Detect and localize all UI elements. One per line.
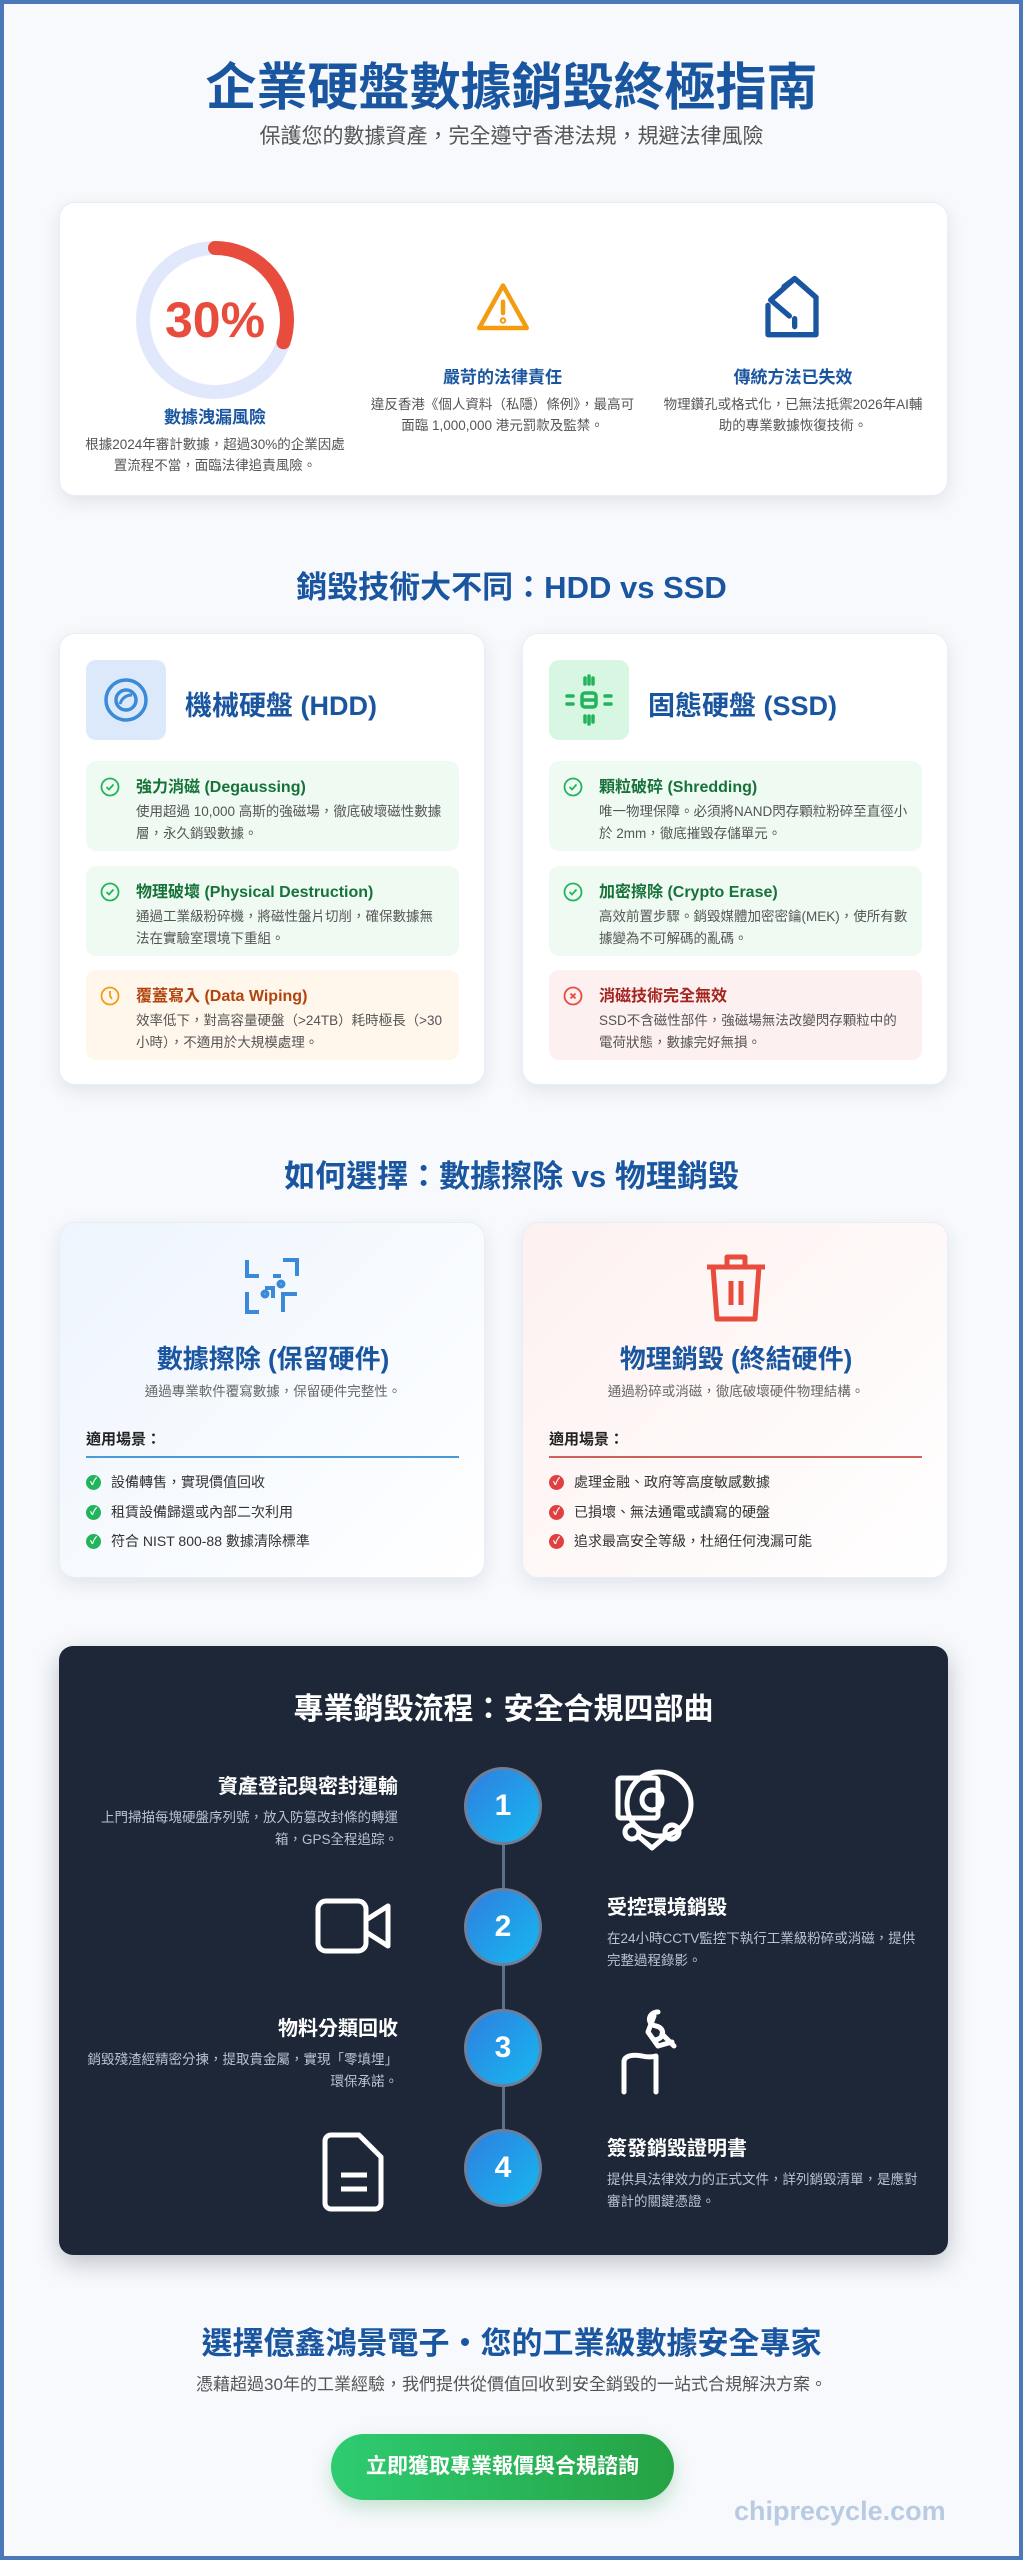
heading: 專業銷毀流程：安全合規四部曲: [294, 1693, 714, 1726]
timeline line: [502, 1806, 505, 2166]
button: CTA: [331, 2434, 674, 2500]
icon: step 4 document: [322, 2132, 384, 2212]
text: brand description: 憑藉超過30年的工業經驗，我們提供從價值回收到安全銷毀的一站式合規解決方案。: [196, 2375, 827, 2394]
panel: physical destruction: ✓: [553, 1506, 560, 1518]
panel: physical destruction: [522, 1222, 948, 1578]
icon: step 2 camera: [316, 1898, 390, 1954]
item: physical destruction: 物理破壞 (Physical Destruction): [136, 884, 373, 901]
step 2: [464, 1888, 542, 1966]
text: step 3: 銷毀殘渣經精密分揀，提取貴金屬，實現「零填埋」環保承諾。: [88, 2052, 398, 2089]
text: step 1: [101, 1776, 398, 1847]
step 3: [464, 2009, 542, 2087]
panel: risk stats: [59, 202, 948, 496]
text: data leak risk: 數據洩漏風險: [164, 408, 266, 427]
heading: SSD: 固態硬盤 (SSD): [648, 691, 837, 721]
item: crypto erase: 加密擦除 (Crypto Erase): [599, 884, 778, 901]
step 1: 1: [495, 1789, 511, 1822]
chart: 30% ring: 30%: [165, 292, 265, 348]
heading: wipe vs destroy: 如何選擇：數據擦除 vs 物理銷毀: [284, 1159, 739, 1194]
step 2: 2: [495, 1910, 511, 1943]
text: step 2: [607, 1896, 915, 1968]
item: data wiping: 覆蓋寫入 (Data Wiping): [136, 988, 307, 1005]
icon: chip: [549, 660, 629, 740]
icon: step 1 transport: [616, 1770, 694, 1851]
list: ✓: [90, 1476, 97, 1488]
step 4: [464, 2129, 542, 2207]
text: step 3: [88, 2018, 398, 2089]
text: step 2: 受控環境銷毀: [607, 1897, 727, 1919]
text: legal liability: 違反香港《個人資料（私隱）條例》，最高可面臨 1,000,000 港元罰款及監禁。: [371, 397, 634, 433]
heading: HDD: 機械硬盤 (HDD): [185, 691, 377, 721]
text: step 2: 在24小時CCTV監控下執行工業級粉碎或消磁，提供完整過程錄影。: [607, 1931, 915, 1968]
text: step 4: [607, 2138, 918, 2209]
heading: 物理銷毀 (終結硬件): [620, 1344, 852, 1374]
icon: broken box: [765, 276, 819, 338]
item: data wiping: [86, 970, 459, 1060]
text: step 4: 提供具法律效力的正式文件，詳列銷毀清單，是應對審計的關鍵憑證。: [607, 2172, 918, 2209]
icon: scan: [245, 1258, 299, 1314]
item: degaussing: 使用超過 10,000 高斯的強磁場，徹底破壞磁性數據層，永久銷毀數據。: [136, 804, 441, 841]
description: 通過粉碎或消磁，徹底破壞硬件物理結構。: [608, 1384, 864, 1399]
text: data leak risk: 根據2024年審計數據，超過30%的企業因處置流程不當，面臨法律追責風險。: [85, 437, 345, 473]
subtitle: 保護您的數據資產，完全遵守香港法規，規避法律風險: [260, 125, 764, 148]
description: 通過專業軟件覆寫數據，保留硬件完整性。: [145, 1384, 401, 1399]
item: degauss fails: 消磁技術完全無效: [599, 988, 727, 1005]
heading: brand: 選擇億鑫鴻景電子・您的工業級數據安全專家: [202, 2326, 822, 2361]
text: step 1: 上門掃描每塊硬盤序列號，放入防篡改封條的轉運箱，GPS全程追踪。: [101, 1810, 398, 1847]
panel: physical destruction: 追求最高安全等級，杜絕任何洩漏可能: [574, 1533, 812, 1549]
panel: data wiping: ✓: [90, 1506, 97, 1518]
panel: HDD: [59, 633, 485, 1085]
watermark: chiprecycle.com: [734, 2496, 946, 2526]
item: crypto erase: [549, 866, 922, 956]
item: degaussing: 強力消磁 (Degaussing): [136, 779, 306, 796]
list: 處理金融、政府等高度敏感數據: [574, 1474, 770, 1490]
title: 企業硬盤數據銷毀終極指南: [205, 59, 818, 116]
heading: 數據擦除 (保留硬件): [157, 1344, 389, 1374]
item: data wiping: 效率低下，對高容量硬盤（>24TB）耗時極長（>30小時），不適用於大規模處理。: [136, 1013, 442, 1050]
icon: warning: [477, 283, 529, 330]
step 1: [464, 1767, 542, 1845]
step 4: 4: [495, 2151, 511, 2184]
item: degauss fails: SSD不含磁性部件，強磁場無法改變閃存顆粒中的電荷狀態，數據完好無損。: [599, 1013, 897, 1050]
icon: disk: [86, 660, 166, 740]
icon: step 3 recycle: [622, 2010, 676, 2094]
text: legal liability: [371, 368, 634, 433]
text: traditional fails: 物理鑽孔或格式化，已無法抵禦2026年AI輔助的專業數據恢復技術。: [664, 397, 922, 433]
panel: data wiping: ✓: [90, 1536, 97, 1546]
panel: process: [59, 1646, 948, 2255]
panel: data wiping: [59, 1222, 485, 1578]
text: data leak risk: [85, 408, 345, 473]
icon: trash: [707, 1254, 765, 1322]
text: traditional fails: [664, 368, 922, 433]
item: shredding: 唯一物理保障。必須將NAND閃存顆粒粉碎至直徑小於 2mm，徹底摧毀存儲單元。: [599, 804, 907, 841]
text: step 1: 資產登記與密封運輸: [218, 1776, 398, 1798]
item: crypto erase: 高效前置步驟。銷毀媒體加密密鑰(MEK)，使所有數據變為不可解碼的亂碼。: [599, 909, 907, 946]
text: step 4: 簽發銷毀證明書: [607, 2138, 747, 2160]
panel: data wiping: 租賃設備歸還或內部二次利用: [111, 1504, 293, 1520]
label: scenarios: 適用場景：: [86, 1431, 161, 1448]
list: ✓: [553, 1476, 560, 1488]
panel: physical destruction: ✓: [553, 1536, 560, 1546]
label: scenarios: 適用場景：: [549, 1431, 624, 1448]
panel: physical destruction: 已損壞、無法通電或讀寫的硬盤: [574, 1504, 770, 1520]
item: physical destruction: 通過工業級粉碎機，將磁性盤片切削，確保數據無法在實驗室環境下重組。: [136, 909, 433, 946]
button: CTA: 立即獲取專業報價與合規諮詢: [366, 2455, 639, 2478]
step 3: 3: [495, 2031, 511, 2064]
chart: 30% ring: [136, 241, 294, 399]
text: legal liability: 嚴苛的法律責任: [443, 368, 562, 387]
list: 設備轉售，實現價值回收: [111, 1474, 265, 1490]
item: degaussing: [86, 761, 459, 851]
item: physical destruction: [86, 866, 459, 956]
panel: data wiping: 符合 NIST 800-88 數據清除標準: [111, 1533, 310, 1549]
item: degauss fails: [549, 970, 922, 1060]
item: shredding: 顆粒破碎 (Shredding): [599, 779, 757, 796]
panel: SSD: [522, 633, 948, 1085]
heading: HDD vs SSD: 銷毀技術大不同：HDD vs SSD: [296, 570, 727, 605]
text: traditional fails: 傳統方法已失效: [734, 368, 852, 387]
item: shredding: [549, 761, 922, 851]
text: step 3: 物料分類回收: [278, 2018, 398, 2040]
